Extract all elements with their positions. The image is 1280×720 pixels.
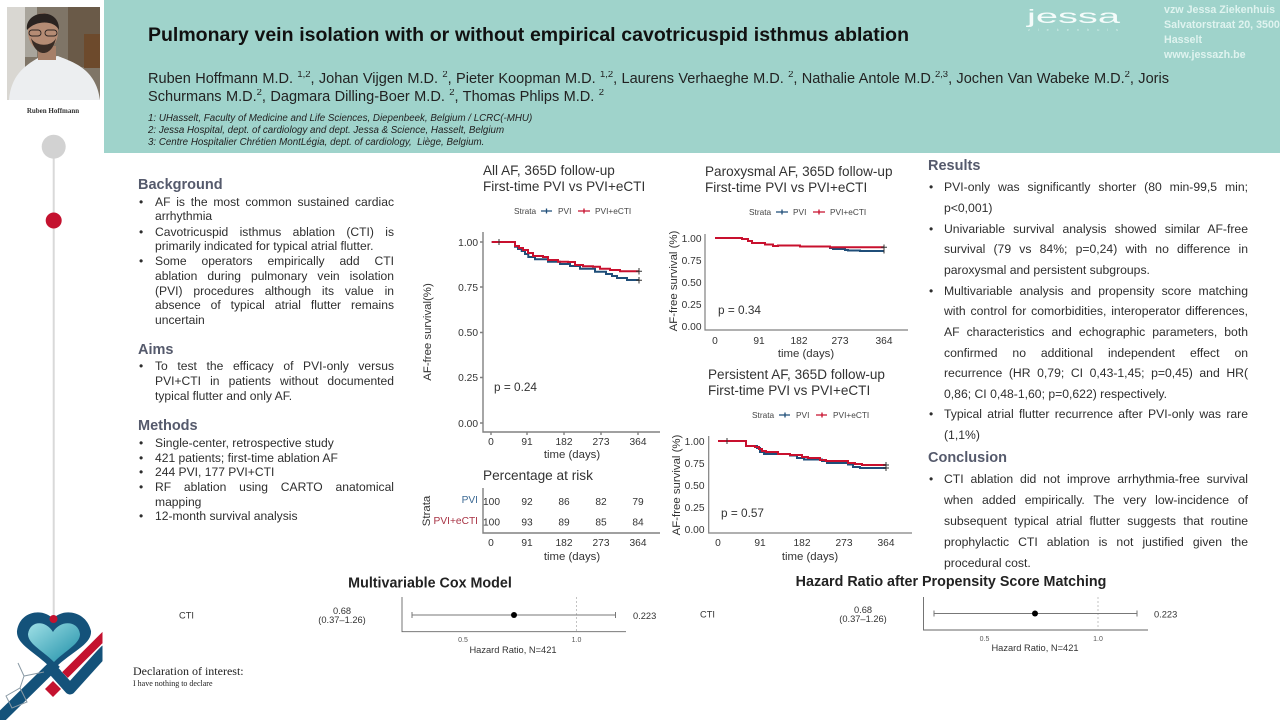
y tick labels: 1.00 bbox=[458, 238, 478, 249]
x tick labels: 273 bbox=[592, 437, 610, 448]
y tick labels: 0.75 bbox=[685, 459, 705, 470]
bullet list: methods: • bbox=[139, 436, 143, 450]
declaration of interest: Declaration of interest: bbox=[133, 664, 244, 678]
legend bbox=[749, 207, 866, 217]
x tick labels: 182 bbox=[790, 336, 808, 347]
legend: PVI bbox=[796, 410, 809, 420]
y tick labels: 1.00 bbox=[685, 437, 705, 448]
bullet list: methods: • bbox=[139, 450, 143, 464]
chart title bbox=[483, 163, 645, 194]
bullet list: results: 0,86; CI 0,48-1,60; p=0,622) respectively. bbox=[944, 386, 1167, 400]
axis titles: AF-free survival (%) bbox=[671, 434, 683, 535]
bullet list: background: primarily indicated for typical atrial flutter. bbox=[155, 239, 373, 253]
axis ticks: 1.0 bbox=[572, 637, 581, 644]
forest plot: multivariable Cox model bbox=[179, 576, 656, 655]
bullet list: results: survival (79 vs 84%; p=0,24) with no difference in bbox=[944, 242, 1248, 256]
legend: Strata bbox=[752, 410, 775, 420]
strata title: Strata bbox=[421, 495, 433, 526]
legend bbox=[514, 206, 631, 216]
x tick labels: 273 bbox=[836, 538, 853, 549]
legend: Strata bbox=[514, 206, 537, 216]
bullet list: aims: typical flutter and only AF. bbox=[155, 389, 292, 403]
Jessa logo: jessa bbox=[1025, 7, 1121, 28]
Jessa logo bbox=[1025, 7, 1121, 32]
axis ticks bbox=[458, 637, 581, 644]
hospital address bbox=[1164, 4, 1280, 60]
x tick labels: 91 bbox=[521, 437, 533, 448]
x axis title: time (days) bbox=[544, 551, 600, 563]
heading: methods: Methods bbox=[138, 418, 198, 434]
PVI curve bbox=[492, 242, 639, 280]
bullet list: conclusion: • bbox=[929, 472, 933, 486]
bullet list: background: • bbox=[139, 254, 143, 268]
legend: PVI+eCTI bbox=[833, 410, 869, 420]
axis ticks: 0.5 bbox=[980, 636, 989, 643]
axis title: Hazard Ratio, N=421 bbox=[469, 645, 557, 655]
PVI row bbox=[483, 497, 644, 508]
p value: 0.223 bbox=[1154, 610, 1177, 620]
table: percentage at risk bbox=[421, 468, 660, 563]
x tick labels: 273 bbox=[832, 336, 849, 347]
y tick labels: 0.50 bbox=[458, 328, 478, 339]
chart title: First-time PVI vs PVI+eCTI bbox=[708, 383, 870, 398]
x tick labels: 0 bbox=[715, 538, 721, 549]
axes bbox=[705, 234, 908, 330]
bullet list: background: • bbox=[139, 194, 143, 208]
chart title: All AF, 365D follow-up bbox=[483, 163, 615, 178]
x tick labels: 91 bbox=[753, 336, 765, 347]
x tick labels: 364 bbox=[630, 437, 647, 448]
affiliations bbox=[148, 113, 532, 148]
bullet list: results: confirmed no additional independent effect on bbox=[944, 346, 1248, 360]
bullet list: conclusion bbox=[929, 472, 1248, 570]
bullet list: results: with control for comorbidities, interoperator differences, bbox=[944, 304, 1248, 318]
point estimate bbox=[1032, 610, 1038, 616]
bullet list: conclusion: subsequent typical atrial flutter suggests that routine bbox=[944, 514, 1248, 528]
x tick labels: 91 bbox=[521, 538, 533, 549]
p value: p = 0.24 bbox=[494, 380, 537, 394]
x tick labels: 182 bbox=[794, 538, 811, 549]
x tick labels bbox=[488, 437, 647, 448]
p value: p = 0.57 bbox=[721, 506, 764, 520]
bullet list: background: AF is the most common sustained cardiac bbox=[155, 194, 394, 208]
axis ticks bbox=[980, 636, 1103, 643]
bullet list: results: paroxysmal and persistent subgroups. bbox=[944, 263, 1150, 277]
table title: Percentage at risk bbox=[483, 468, 593, 483]
bullet list: methods: • bbox=[139, 465, 143, 479]
bullet list: aims bbox=[139, 359, 394, 403]
PVI curve bbox=[715, 238, 884, 251]
y tick labels: 0.00 bbox=[685, 525, 705, 536]
bullet list: background: uncertain bbox=[155, 312, 205, 326]
bullet list: conclusion: procedural cost. bbox=[944, 556, 1031, 570]
plot frame bbox=[402, 597, 626, 632]
x tick labels: 182 bbox=[556, 538, 573, 549]
row label: CTI bbox=[179, 610, 194, 620]
estimate: 0.68 bbox=[333, 606, 351, 616]
timeline decoration bbox=[42, 135, 66, 617]
chart title bbox=[708, 367, 885, 398]
PVI+eCTI row: 100 bbox=[483, 518, 500, 528]
PVI+eCTI row: 85 bbox=[595, 518, 607, 528]
panel: results and conclusion bbox=[928, 158, 1248, 570]
bullet list: background: ablation during pulmonary vein isolation bbox=[155, 268, 394, 282]
estimate bbox=[839, 605, 887, 624]
bullet list: results: Univariable survival analysis showed similar AF-free bbox=[944, 222, 1248, 236]
axis title: Hazard Ratio, N=421 bbox=[991, 643, 1079, 653]
bullet list: results bbox=[929, 180, 1248, 442]
chart: persistent AF survival bbox=[671, 367, 912, 563]
bullet list: results: • bbox=[929, 284, 933, 298]
censor marks bbox=[881, 244, 887, 254]
heading: aims: Aims bbox=[138, 342, 173, 358]
y tick labels: 0.50 bbox=[685, 481, 705, 492]
heading: background: Background bbox=[138, 177, 223, 193]
confidence interval bbox=[412, 612, 616, 618]
chart title: First-time PVI vs PVI+eCTI bbox=[705, 180, 867, 195]
heading: conclusion: Conclusion bbox=[928, 450, 1007, 466]
bullet list: results: • bbox=[929, 407, 933, 421]
declaration of interest bbox=[133, 664, 244, 688]
x tick labels: 91 bbox=[754, 538, 766, 549]
x tick labels bbox=[488, 538, 647, 549]
legend: PVI+eCTI bbox=[595, 206, 631, 216]
bullet list: methods: Single-center, retrospective study bbox=[155, 436, 334, 450]
chart title: Persistent AF, 365D follow-up bbox=[708, 367, 885, 382]
bullet list: methods: 244 PVI, 177 PVI+CTI bbox=[155, 465, 274, 479]
presenter name: Ruben Hoffmann bbox=[27, 107, 79, 115]
x tick labels bbox=[712, 336, 893, 347]
bullet list: results: Typical atrial flutter recurrence after PVI-only was rare bbox=[944, 407, 1248, 421]
point estimate bbox=[511, 612, 517, 618]
bullet list: results: • bbox=[929, 222, 933, 236]
plot frame bbox=[924, 597, 1148, 630]
x tick labels: 364 bbox=[878, 538, 895, 549]
x tick labels: 364 bbox=[630, 538, 647, 549]
authors bbox=[148, 71, 1169, 104]
heading: results: Results bbox=[928, 158, 980, 174]
estimate bbox=[318, 606, 366, 625]
bullet list: conclusion: prophylactic CTI ablation is not justified given the bbox=[944, 534, 1248, 548]
axis titles: AF-free survival(%) bbox=[422, 283, 434, 381]
PVI+eCTI curve bbox=[718, 441, 886, 465]
Jessa logo: ziekenhuis bbox=[1028, 27, 1118, 32]
PVI+eCTI row bbox=[483, 518, 644, 528]
y tick labels: 0.75 bbox=[682, 256, 702, 267]
axis ticks: 1.0 bbox=[1093, 636, 1103, 643]
bullet list: background: Cavotricuspid isthmus ablation (CTI) is bbox=[155, 224, 394, 238]
bullet list: methods: 12-month survival analysis bbox=[155, 509, 298, 523]
forest plot: propensity score matching bbox=[700, 574, 1177, 653]
hospital address: vzw Jessa Ziekenhuis bbox=[1164, 4, 1275, 16]
forest title: Multivariable Cox Model bbox=[348, 576, 512, 592]
bullet list: results: (1,1%) bbox=[944, 428, 980, 442]
title: Pulmonary vein isolation with or without empirical cavotricuspid isthmus ablation bbox=[148, 24, 909, 46]
logo: heart bbox=[0, 612, 106, 720]
bullet list: conclusion: CTI ablation did not improve arrhythmia-free survival bbox=[944, 472, 1248, 486]
chart: paroxysmal AF survival bbox=[668, 164, 908, 360]
PVI+eCTI row: 89 bbox=[558, 518, 570, 528]
bullet list: background: Some operators empirically add CTI bbox=[155, 254, 394, 268]
bullet list: results: recurrence (HR 0,79; CI 0,43-1,45; p=0,45) and HR( bbox=[944, 366, 1248, 380]
bullet list: background: • bbox=[139, 224, 143, 238]
axis titles bbox=[422, 283, 600, 461]
y tick labels: 0.25 bbox=[685, 503, 705, 514]
PVI row: 86 bbox=[558, 497, 570, 508]
axes bbox=[480, 232, 660, 435]
axis titles: time (days) bbox=[544, 449, 600, 461]
bullet list: methods: 421 patients; first-time ablation AF bbox=[155, 450, 338, 464]
bullet list: aims: PVI+CTI in patients without documented bbox=[155, 374, 394, 388]
axis titles: AF-free survival (%) bbox=[668, 230, 680, 331]
chart title: First-time PVI vs PVI+eCTI bbox=[483, 179, 645, 194]
chart title bbox=[705, 164, 892, 195]
chart title: Paroxysmal AF, 365D follow-up bbox=[705, 164, 892, 179]
bullet list: methods: • bbox=[139, 480, 143, 494]
estimate: (0.37–1.26) bbox=[318, 615, 366, 625]
forest title: Hazard Ratio after Propensity Score Matching bbox=[796, 574, 1106, 590]
header band bbox=[104, 0, 1280, 153]
bullet list: results: • bbox=[929, 180, 933, 194]
y tick labels: 0.00 bbox=[682, 322, 702, 333]
confidence interval bbox=[934, 610, 1137, 616]
bullet list: background: (PVI) procedures although its value in bbox=[155, 284, 394, 298]
strata labels: PVI bbox=[462, 495, 478, 506]
x tick labels: 364 bbox=[876, 336, 893, 347]
strata labels: PVI+eCTI bbox=[434, 516, 478, 527]
PVI row: 100 bbox=[483, 497, 500, 508]
PVI+eCTI row: 84 bbox=[632, 518, 644, 528]
bullet list: methods: RF ablation using CARTO anatomical bbox=[155, 480, 394, 494]
bullet list: background bbox=[139, 194, 394, 326]
estimate: 0.68 bbox=[854, 605, 872, 615]
legend bbox=[752, 410, 869, 420]
y tick labels: 0.25 bbox=[682, 300, 702, 311]
axis titles bbox=[671, 434, 838, 563]
bullet list: results: p<0,001) bbox=[944, 201, 992, 215]
affiliations: 3: Centre Hospitalier Chrétien MontLégia, dept. of cardiology, Liège, Belgium. bbox=[148, 137, 484, 148]
table axes bbox=[483, 488, 660, 533]
chart: all AF survival bbox=[422, 163, 660, 461]
estimate: (0.37–1.26) bbox=[839, 614, 887, 624]
bullet list: results: AF characteristics and echographic parameters, both bbox=[944, 325, 1248, 339]
hospital address: Hasselt bbox=[1164, 34, 1202, 46]
bullet list: results: PVI-only was significantly shorter (80 min-99,5 min; bbox=[944, 180, 1248, 194]
axis titles: time (days) bbox=[782, 551, 838, 563]
legend: PVI+eCTI bbox=[830, 207, 866, 217]
y tick labels: 0.00 bbox=[458, 419, 478, 430]
portrait photo bbox=[7, 7, 100, 100]
bullet list: background: arrhythmia bbox=[155, 209, 212, 223]
legend: PVI bbox=[793, 207, 806, 217]
bullet list: methods bbox=[139, 436, 394, 523]
bullet list: methods: mapping bbox=[155, 494, 201, 508]
y tick labels: 1.00 bbox=[682, 234, 702, 245]
PVI+eCTI row: 93 bbox=[521, 518, 533, 528]
y tick labels bbox=[682, 234, 702, 333]
PVI row: 82 bbox=[595, 497, 607, 508]
x tick labels bbox=[715, 538, 895, 549]
bullet list: aims: To test the efficacy of PVI-only versus bbox=[155, 359, 394, 373]
x tick labels: 0 bbox=[488, 437, 494, 448]
PVI+eCTI curve bbox=[492, 242, 639, 271]
bullet list: methods: • bbox=[139, 509, 143, 523]
p value: 0.223 bbox=[633, 611, 656, 621]
axis titles bbox=[668, 230, 834, 360]
x tick labels: 182 bbox=[556, 437, 573, 448]
x tick labels: 0 bbox=[712, 336, 718, 347]
PVI+eCTI curve bbox=[715, 238, 884, 247]
panel: background, aims and methods bbox=[138, 177, 394, 523]
PVI row: 92 bbox=[521, 497, 533, 508]
declaration of interest: I have nothing to declare bbox=[133, 679, 213, 688]
y tick labels: 0.75 bbox=[458, 283, 478, 294]
axis titles: time (days) bbox=[778, 348, 834, 360]
legend: PVI bbox=[558, 206, 571, 216]
hospital address: Salvatorstraat 20, 3500 bbox=[1164, 18, 1280, 30]
row label: CTI bbox=[700, 610, 715, 620]
legend: Strata bbox=[749, 207, 772, 217]
y tick labels: 0.25 bbox=[458, 373, 478, 384]
x tick labels: 0 bbox=[488, 538, 494, 549]
axis ticks: 0.5 bbox=[458, 637, 468, 644]
bullet list: background: absence of typical atrial flutter remains bbox=[155, 298, 394, 312]
x tick labels: 273 bbox=[592, 538, 610, 549]
y tick labels: 0.50 bbox=[682, 278, 702, 289]
axes bbox=[709, 436, 912, 533]
y tick labels bbox=[458, 238, 478, 430]
censor marks bbox=[727, 438, 889, 471]
strata labels bbox=[434, 495, 478, 527]
hospital address: www.jessazh.be bbox=[1164, 48, 1246, 60]
affiliations: 1: UHasselt, Faculty of Medicine and Life Sciences, Diepenbeek, Belgium / LCRC(-MHU) bbox=[148, 113, 532, 124]
bullet list: conclusion: when added empirically. The very low-incidence of bbox=[944, 493, 1248, 507]
PVI curve bbox=[718, 441, 886, 468]
PVI row: 79 bbox=[632, 497, 644, 508]
censor marks bbox=[499, 239, 642, 284]
affiliations: 2: Jessa Hospital, dept. of cardiology and dept. Jessa & Science, Hasselt, Belgium bbox=[148, 125, 504, 136]
bullet list: results: Multivariable analysis and propensity score matching bbox=[944, 284, 1248, 298]
y tick labels bbox=[685, 437, 705, 536]
bullet list: aims: • bbox=[139, 359, 143, 373]
p value: p = 0.34 bbox=[718, 303, 761, 317]
